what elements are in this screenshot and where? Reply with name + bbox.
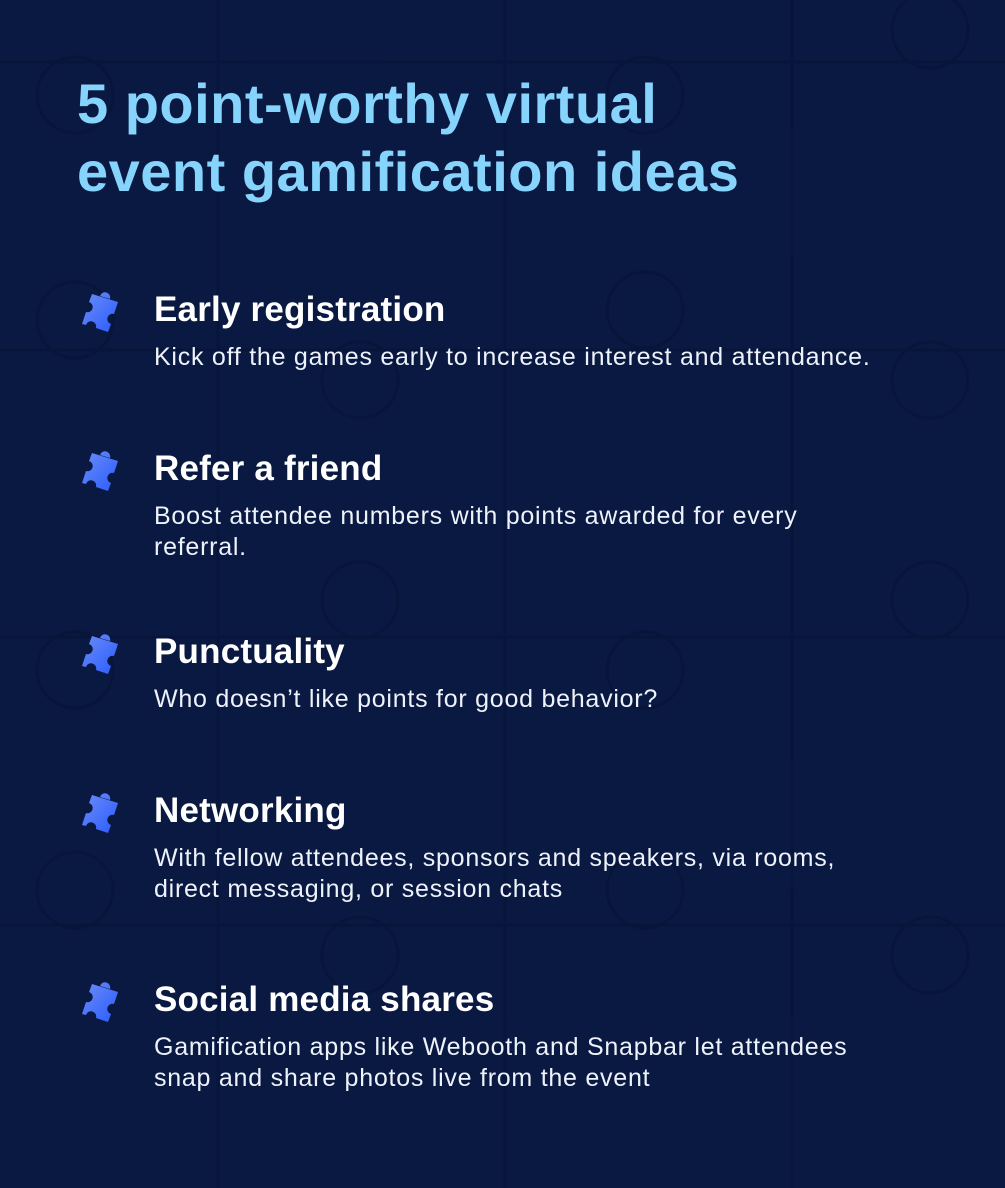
item: punctuality: Who doesn’t like points for good behavior? — [154, 685, 658, 713]
item: networking: With fellow attendees, sponsors and speakers, via rooms, — [154, 844, 835, 872]
title: event gamification ideas — [77, 140, 739, 203]
item: early registration — [82, 290, 871, 371]
item: refer a friend: referral. — [154, 533, 247, 561]
icon: puzzle piece — [82, 634, 118, 674]
item: refer a friend — [82, 449, 798, 561]
item: networking: Networking — [154, 791, 347, 830]
item: punctuality — [82, 632, 658, 713]
title: 5 point-worthy virtual — [77, 72, 657, 135]
item: networking: direct messaging, or session chats — [154, 875, 563, 903]
item: social media shares: Gamification apps like Webooth and Snapbar let attendees — [154, 1033, 847, 1061]
item: refer a friend: Boost attendee numbers with points awarded for every — [154, 502, 798, 530]
item: social media shares — [82, 980, 847, 1092]
item: early registration: Early registration — [154, 290, 445, 329]
item: social media shares: snap and share photos live from the event — [154, 1064, 650, 1092]
item: refer a friend: Refer a friend — [154, 449, 382, 488]
item: early registration: Kick off the games early to increase interest and attendance. — [154, 343, 871, 371]
item: networking — [82, 791, 835, 903]
icon: puzzle piece — [82, 982, 118, 1022]
icon: puzzle piece — [82, 292, 118, 332]
item: social media shares: Social media shares — [154, 980, 494, 1019]
icon: puzzle piece — [82, 793, 118, 833]
title — [77, 72, 739, 203]
icon: puzzle piece — [82, 451, 118, 491]
item: punctuality: Punctuality — [154, 632, 345, 671]
